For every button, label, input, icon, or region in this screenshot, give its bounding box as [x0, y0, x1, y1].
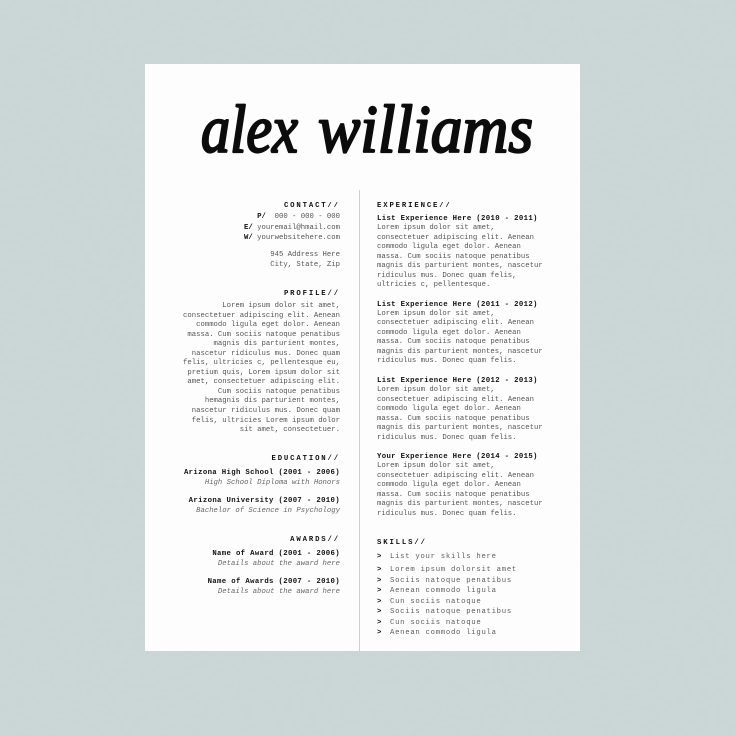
skills list: >	[377, 618, 381, 626]
education entry 2	[188, 496, 340, 515]
heading: profile: PROFILE//	[284, 290, 340, 298]
column divider	[358, 190, 360, 652]
experience entry 3: Lorem ipsum dolor sit amet, consectetuer adipiscing elit. Aenean commodo ligula eget dolor. Aenean massa. Cum sociis natoque penatibus magnis dis parturient montes, nascetur ridiculus mus. Donec quam felis.	[377, 386, 543, 442]
skills list: Aenean commodo ligula	[390, 629, 497, 637]
skills list: Sociis natoque penatibus	[390, 608, 512, 616]
experience entry 3: List Experience Here (2012 - 2013)	[377, 377, 538, 385]
experience entry 4: Lorem ipsum dolor sit amet, consectetuer adipiscing elit. Aenean commodo ligula eget dolor. Aenean massa. Cum sociis natoque penatibus magnis dis parturient montes, nascetur ridiculus mus. Donec quam felis.	[377, 462, 543, 518]
skills list: Cun sociis natoque	[390, 618, 481, 626]
skills list: Aenean commodo ligula	[390, 587, 497, 595]
skills list: Lorem ipsum dolorsit amet	[390, 566, 517, 574]
award entry 2	[208, 578, 340, 596]
skills list: >	[377, 608, 381, 616]
heading: awards: AWARDS//	[290, 536, 340, 544]
address: 945 Address Here City, State, Zip	[270, 251, 340, 269]
heading: experience: EXPERIENCE//	[377, 202, 452, 210]
skills list: List your skills here	[390, 553, 497, 561]
skills list: >	[377, 553, 381, 561]
experience entry 4: Your Experience Here (2014 - 2015)	[377, 453, 538, 461]
education entry 1	[184, 468, 340, 487]
experience entry 2: List Experience Here (2011 - 2012)	[377, 300, 538, 308]
award entry 1: Name of Award (2001 - 2006)	[212, 550, 340, 558]
title: name: williams	[318, 91, 533, 167]
resume sheet	[145, 64, 580, 651]
skills list: >	[377, 598, 381, 606]
heading: education: EDUCATION//	[271, 455, 340, 463]
skills list: Cun sociis natoque	[390, 598, 481, 606]
skills list: >	[377, 576, 381, 584]
experience entry 1: Lorem ipsum dolor sit amet, consectetuer adipiscing elit. Aenean commodo ligula eget dolor. Aenean massa. Cum sociis natoque penatibus magnis dis parturient montes, nascetur ridiculus mus. Donec quam felis, ultricies c, pellentesque.	[377, 224, 543, 289]
education entry 1: High School Diploma with Honors	[205, 479, 340, 487]
education entry 1: Arizona High School (2001 - 2006)	[184, 469, 340, 477]
profile text: Lorem ipsum dolor sit amet, consectetuer adipiscing elit. Aenean commodo ligula eget dolor. Aenean massa. Cum sociis natoque penatibus magnis dis parturient montes, nascetur ridiculus mus. Donec quam felis, ultricies c, pellentesque eu, pretium quis, Lorem ipsum dolor sit amet, consectetuer adipiscing elit. Cum sociis natoque penatibus hemagnis dis parturient montes, nascetur ridiculus mus. Donec quam felis, ultricies Lorem ipsum dolor sit amet, consectetuer.	[183, 302, 340, 434]
skills list: >	[377, 566, 381, 574]
award entry 2: Name of Awards (2007 - 2010)	[208, 578, 340, 586]
award entry 1	[212, 550, 340, 568]
skills list	[377, 552, 517, 637]
title: name: alex	[201, 91, 298, 167]
skills list: >	[377, 587, 381, 595]
experience entry 1: List Experience Here (2010 - 2011)	[377, 215, 538, 223]
award entry 1: Details about the award here	[218, 560, 340, 568]
experience entry 2: Lorem ipsum dolor sit amet, consectetuer adipiscing elit. Aenean commodo ligula eget dolor. Aenean massa. Cum sociis natoque penatibus magnis dis parturient montes, nascetur ridiculus mus. Donec quam felis.	[377, 310, 543, 365]
award entry 2: Details about the award here	[218, 588, 340, 596]
heading: skills: SKILLS//	[377, 539, 427, 547]
education entry 2: Bachelor of Science in Psychology	[196, 507, 340, 515]
contact details: P/ 000 - 000 - 000 E/ youremail@hmail.com W/ yourwebsitehere.com	[244, 213, 340, 242]
skills list: >	[377, 629, 381, 637]
skills list: Sociis natoque penatibus	[390, 576, 512, 584]
education entry 2: Arizona University (2007 - 2010)	[189, 497, 340, 505]
heading: contact: CONTACT//	[284, 202, 340, 210]
